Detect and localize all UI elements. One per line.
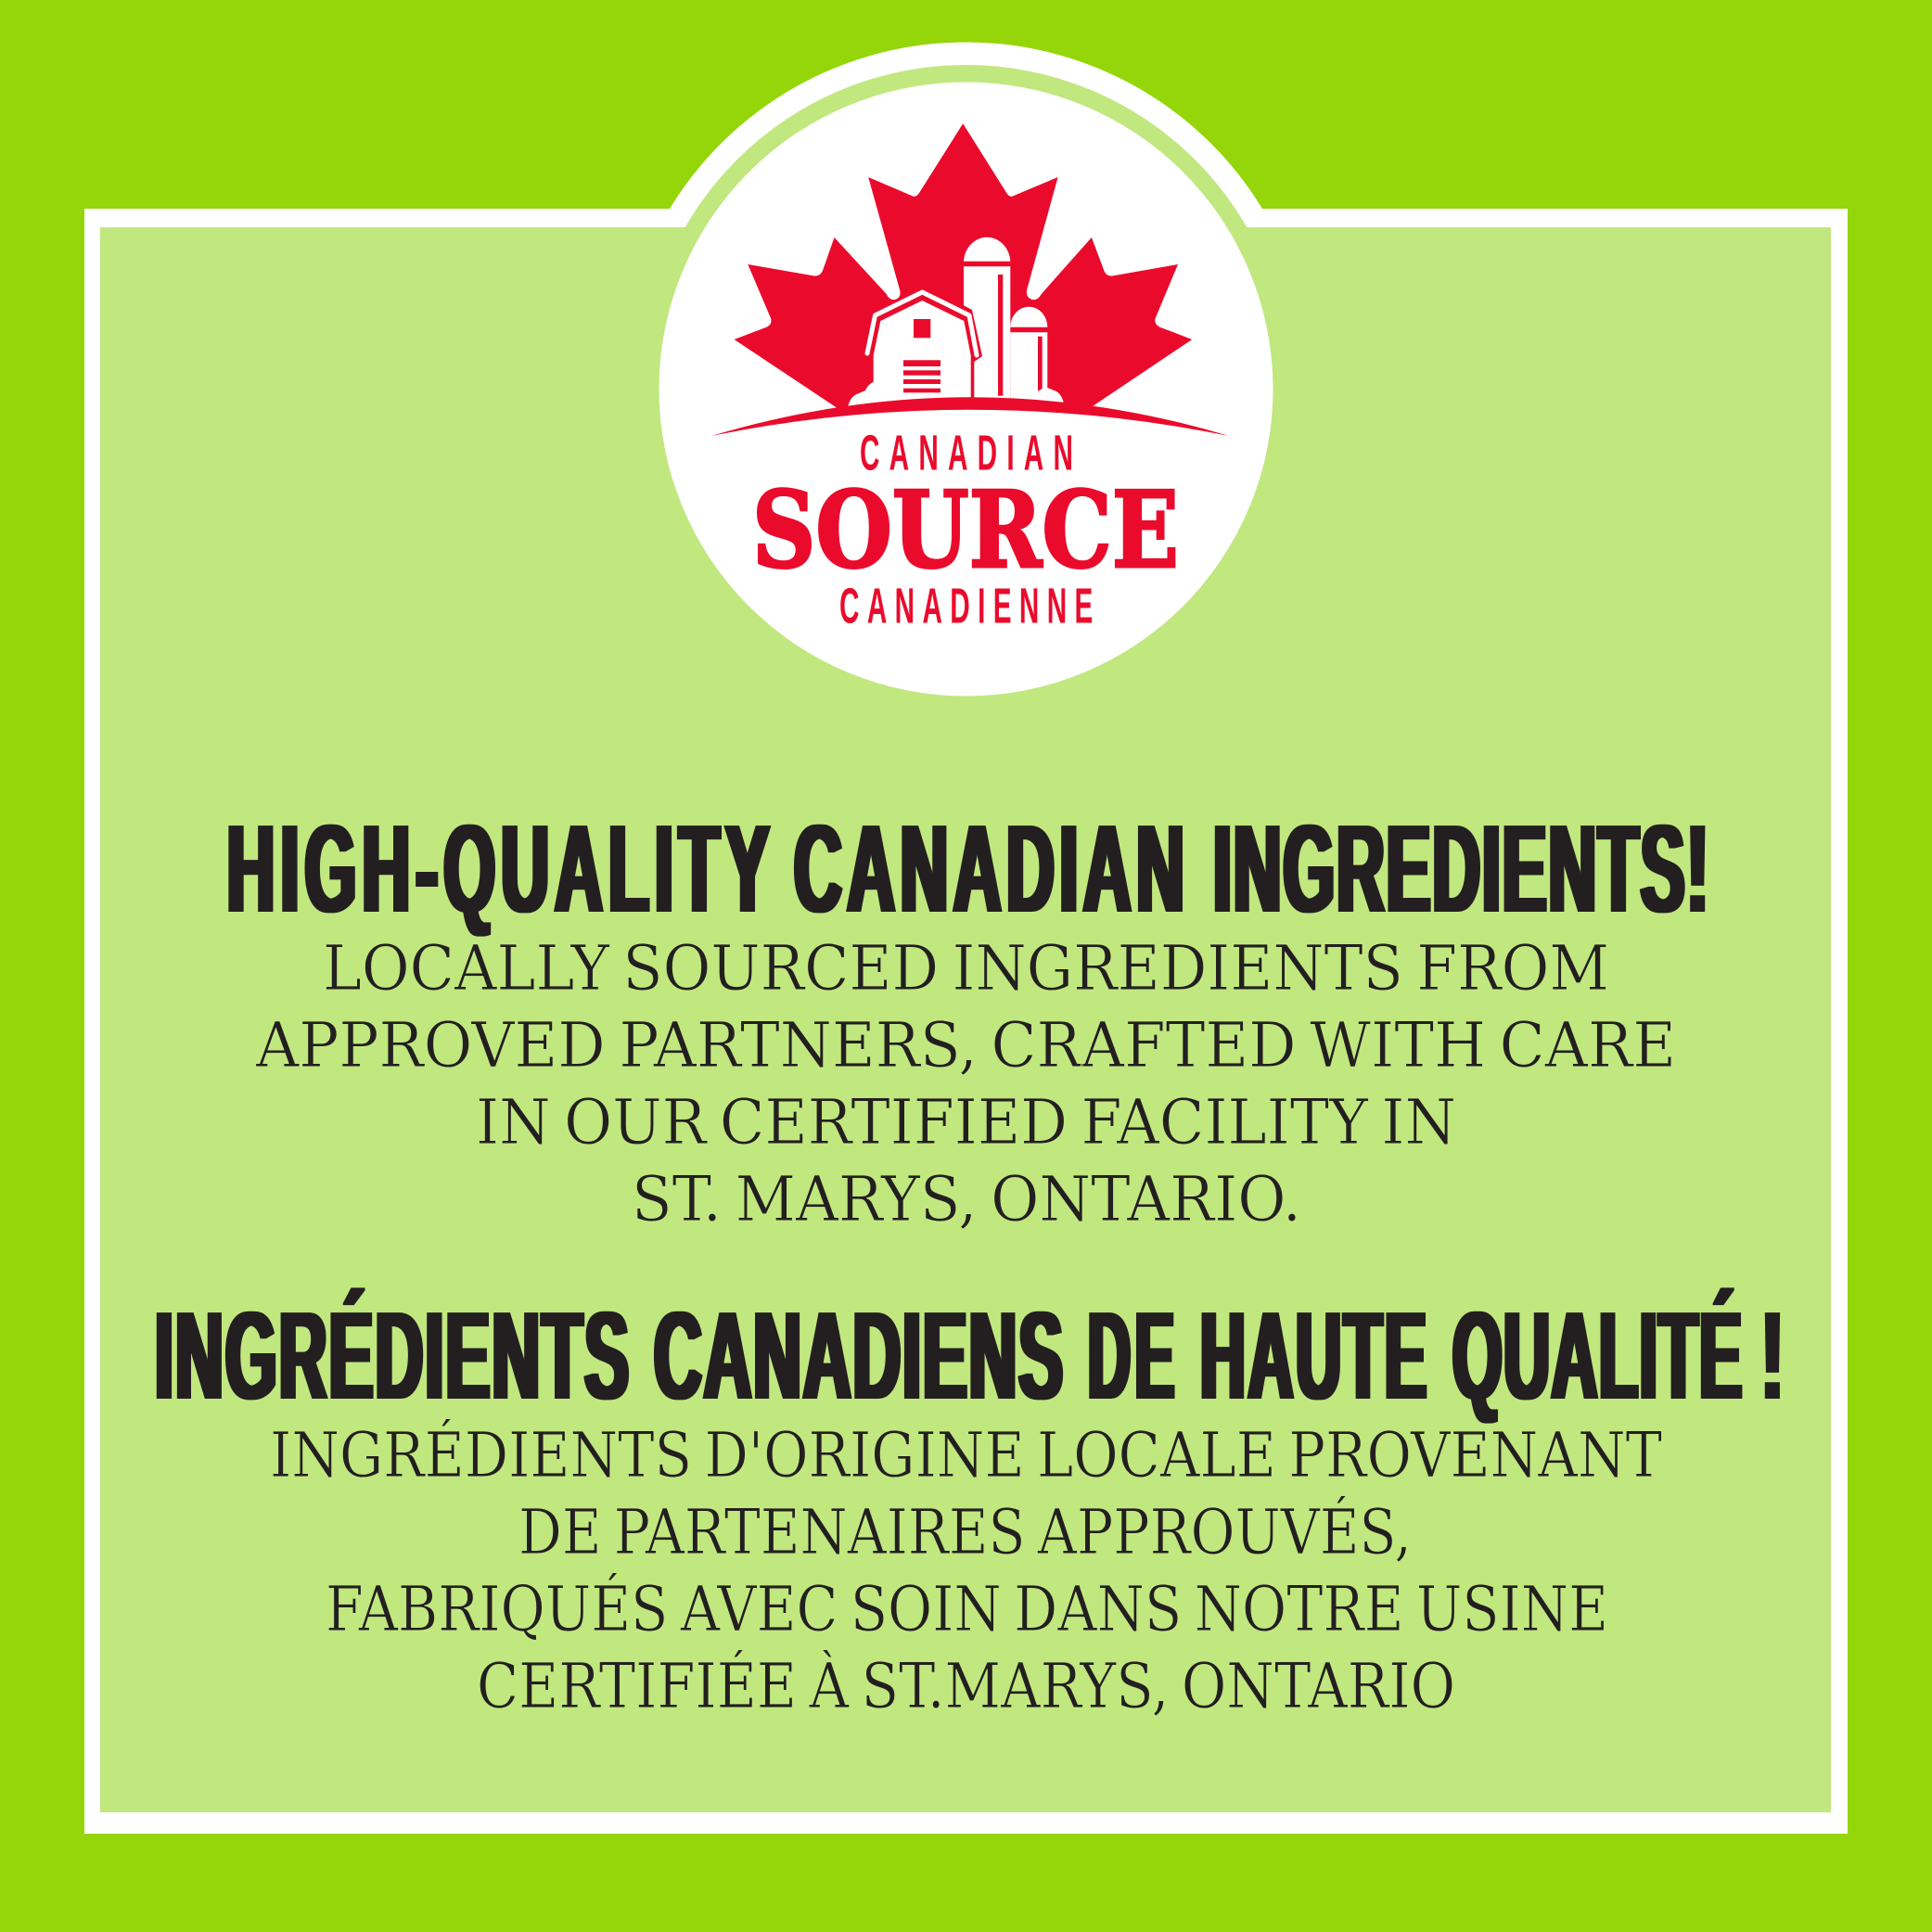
body: French	[270, 1418, 1662, 1722]
heading: French: QUALITÉ	[1452, 1286, 1742, 1426]
short silo slit	[1038, 337, 1043, 391]
text: SOURCE: SOURCE	[752, 468, 1179, 592]
heading: French: DE	[1088, 1287, 1174, 1426]
heading: English	[227, 799, 1708, 939]
ground swoosh	[711, 397, 1229, 436]
tall silo slit	[998, 275, 1003, 396]
body: English: ST. MARYS, ONTARIO.	[632, 1163, 1301, 1235]
body: English: IN OUR CERTIFIED FACILITY IN	[476, 1086, 1456, 1158]
text block: French	[155, 1285, 1784, 1722]
heading: English: HIGH-QUALITY	[227, 799, 770, 939]
logo: Canadian Source Canadienne	[711, 123, 1229, 634]
icon: red maple leaf	[735, 123, 1192, 408]
body: English	[255, 932, 1676, 1235]
heading: French: !	[1761, 1286, 1784, 1426]
body: French: DE PARTENAIRES APPROUVÉS,	[518, 1495, 1412, 1568]
barn window	[914, 319, 930, 338]
barn roof outline	[867, 292, 977, 355]
body: English: APPROVED PARTNERS, CRAFTED WITH CARE	[255, 1009, 1676, 1081]
heading: English: INGREDIENTS!	[1213, 799, 1708, 939]
barn red outline	[922, 284, 982, 408]
heading: French: INGRÉDIENTS	[155, 1286, 629, 1426]
heading: French: CANADIENS	[654, 1286, 1063, 1426]
text: CANADIAN: CANADIAN	[860, 427, 1073, 481]
barn body with hills	[848, 301, 971, 408]
heading: French	[155, 1285, 1784, 1426]
heading: French: HAUTE	[1200, 1285, 1427, 1426]
body: French: FABRIQUÉS AVEC SOIN DANS NOTRE USINE	[326, 1572, 1608, 1645]
barn door slats	[903, 360, 940, 392]
text block: English	[227, 799, 1708, 1235]
text: CANADIENNE: CANADIENNE	[839, 580, 1093, 634]
body: French: CERTIFIÉE À ST.MARYS, ONTARIO	[477, 1649, 1455, 1722]
body: French: INGRÉDIENTS D'ORIGINE LOCALE PROVENANT	[270, 1418, 1662, 1491]
icon: barn and silos	[848, 237, 1065, 408]
tall silo	[964, 237, 1010, 408]
short silo	[1010, 307, 1065, 408]
body: English: LOCALLY SOURCED INGREDIENTS FROM	[323, 932, 1609, 1004]
heading: English: CANADIAN	[794, 799, 1184, 939]
